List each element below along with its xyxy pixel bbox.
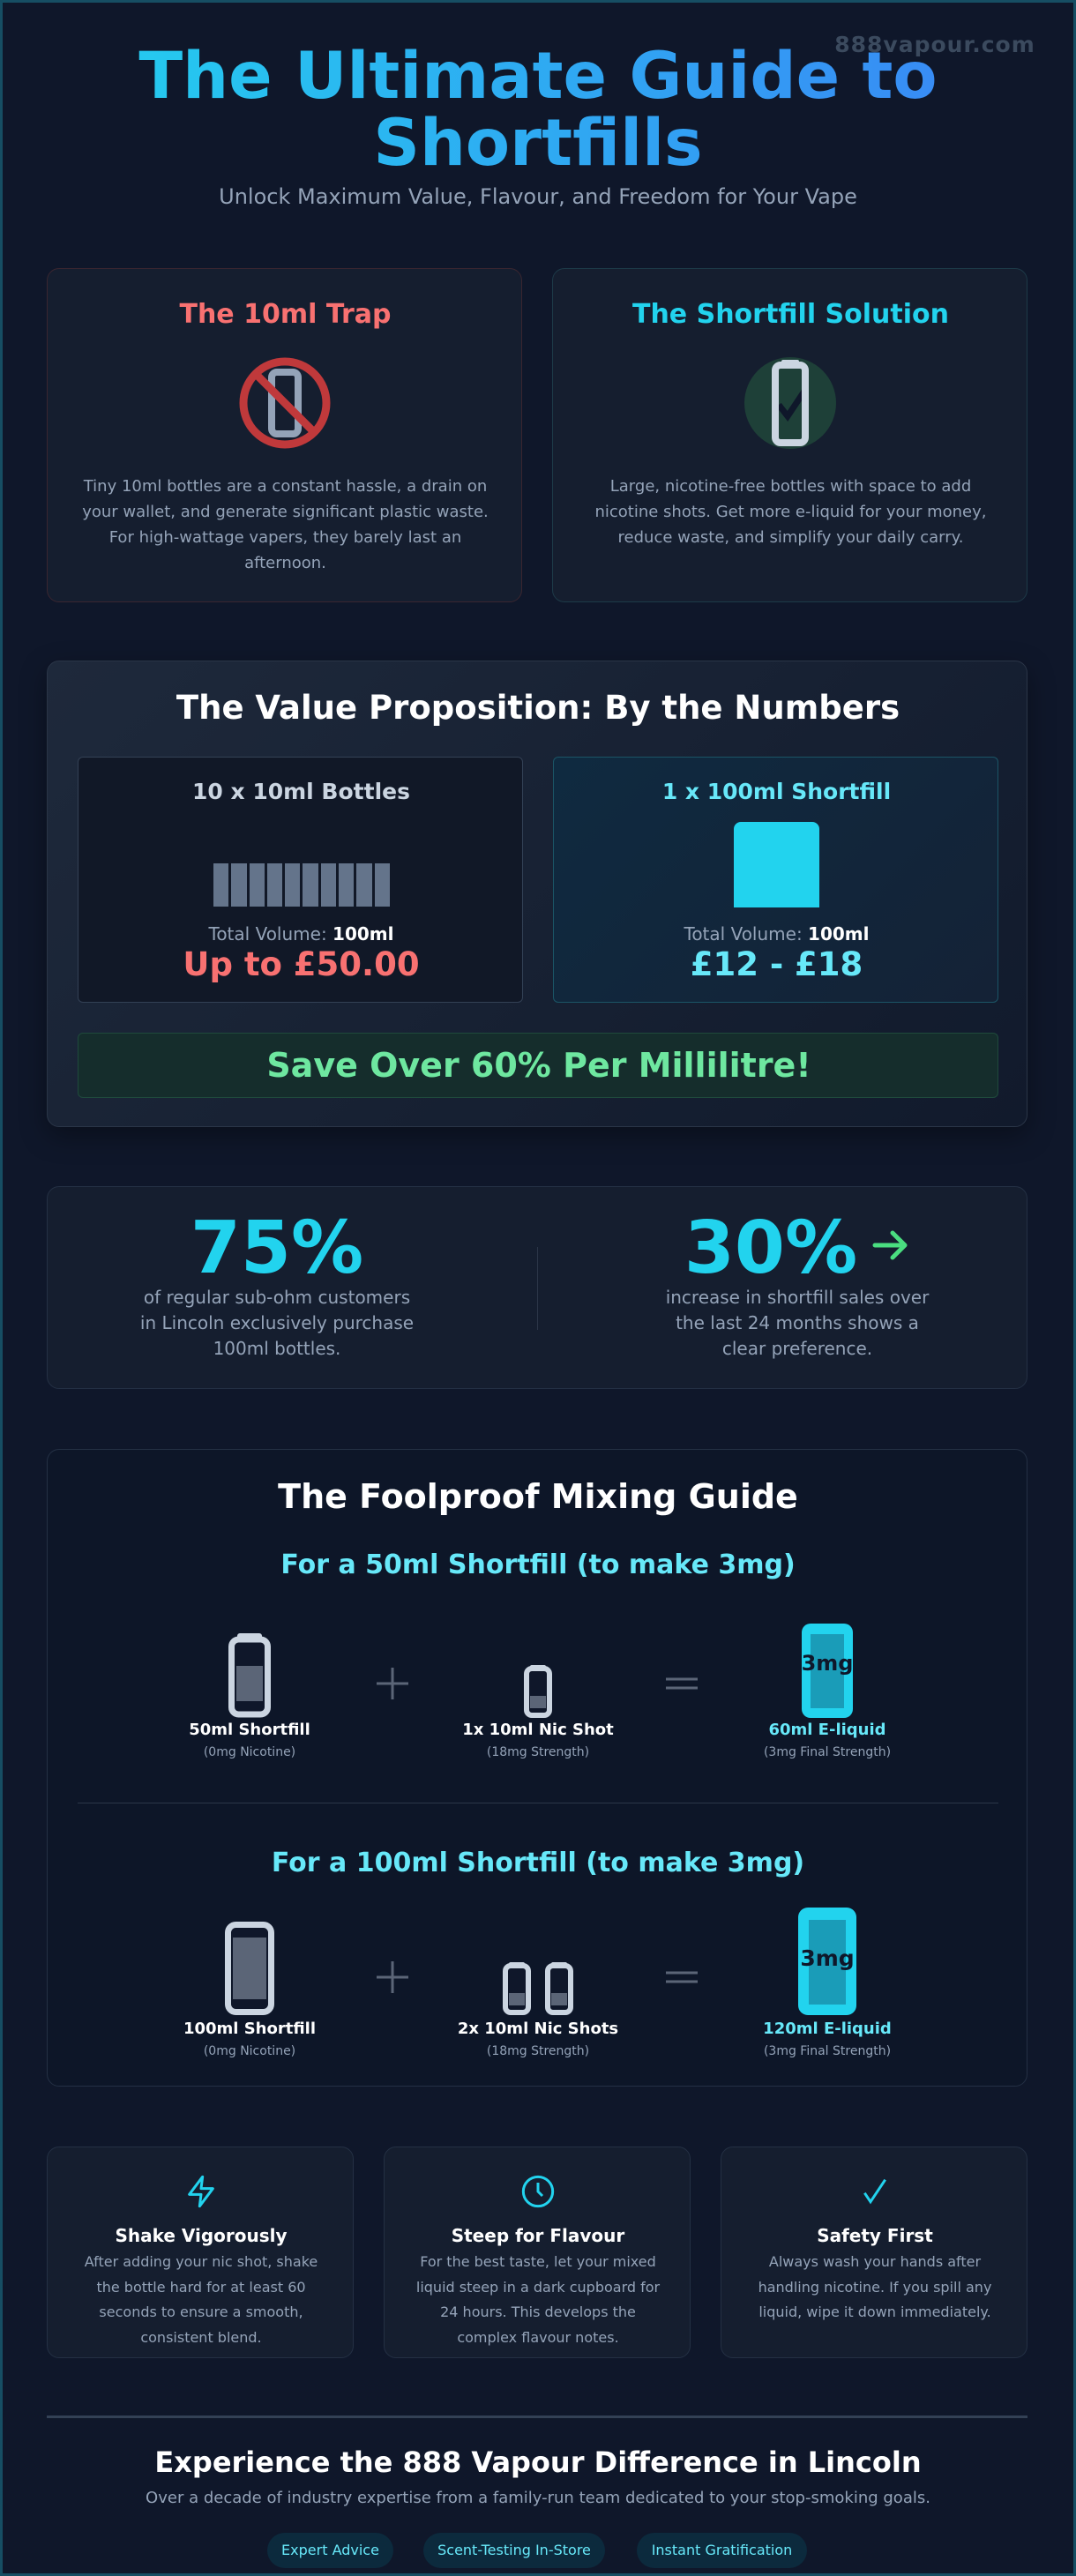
panel: the 10ml trap bbox=[47, 268, 522, 602]
icon: plus bbox=[377, 1668, 408, 1699]
heading: 10ml trap: The 10ml Trap bbox=[179, 299, 392, 330]
stat: 75%: 100ml bottles. bbox=[213, 1338, 340, 1359]
heading: mixing guide: The Foolproof Mixing Guide bbox=[278, 1477, 798, 1516]
pill: expert advice: Expert Advice bbox=[281, 2542, 379, 2558]
text: steep: complex flavour notes. bbox=[457, 2328, 619, 2346]
stat: 75%: 75% bbox=[191, 1206, 363, 1290]
price: up to 50: Up to £50.00 bbox=[183, 945, 420, 983]
subheading: 50ml: For a 50ml Shortfill (to make 3mg) bbox=[280, 1549, 796, 1580]
subtitle: Unlock Maximum Value, Flavour, and Freedom for Your Vape bbox=[219, 184, 857, 209]
label: 60ml e-liquid: 60ml E-liquid bbox=[768, 1721, 886, 1739]
stat: 30%: increase in shortfill sales over bbox=[666, 1287, 929, 1308]
text: steep: For the best taste, let your mixed bbox=[420, 2253, 656, 2270]
text: shake: seconds to ensure a smooth, bbox=[99, 2303, 303, 2320]
pill: instant gratification: Instant Gratification bbox=[652, 2542, 792, 2558]
icon: plus bbox=[377, 1961, 408, 1993]
icon: lightning bbox=[188, 2175, 214, 2208]
icon: clock bbox=[522, 2175, 554, 2208]
panel: mixing guide bbox=[47, 1449, 1027, 2087]
pill: scent testing: Scent-Testing In-Store bbox=[437, 2542, 591, 2558]
text: safety: liquid, wipe it down immediately. bbox=[758, 2303, 991, 2320]
text: safety: Always wash your hands after bbox=[769, 2253, 981, 2270]
icon: equals bbox=[666, 1972, 698, 1982]
heading: value proposition: The Value Proposition: By the Numbers bbox=[176, 689, 900, 727]
footer text: Over a decade of industry expertise from a family-run team dedicated to your stop-smoking goals. bbox=[146, 2489, 930, 2507]
icon: 60ml result: 3mg bbox=[802, 1651, 853, 1676]
text: 10ml trap description: afternoon. bbox=[244, 554, 326, 572]
text: 10ml trap description bbox=[82, 477, 489, 572]
text: steep: liquid steep in a dark cupboard for bbox=[416, 2279, 660, 2295]
label: 120ml e-liquid bbox=[763, 2020, 892, 2058]
text: shortfill description bbox=[594, 477, 987, 547]
icon: 120ml result: 3mg bbox=[800, 1945, 855, 1971]
text: total volume: Total Volume: 100ml bbox=[208, 923, 393, 945]
title bbox=[0, 43, 1076, 177]
label: 50ml shortfill: (0mg Nicotine) bbox=[204, 1745, 295, 1759]
icon: green arrow bbox=[873, 1231, 907, 1259]
label: nic shots: 2x 10ml Nic Shots bbox=[458, 2020, 618, 2038]
text: shake: After adding your nic shot, shake bbox=[85, 2253, 318, 2270]
label: nic shots: (18mg Strength) bbox=[487, 2044, 589, 2058]
icon: two nic shots bbox=[503, 1962, 573, 2015]
pill: scent testing bbox=[423, 2533, 605, 2568]
icon: check bbox=[863, 2178, 886, 2205]
label: 100ml shortfill bbox=[183, 2020, 316, 2058]
panel: tip shake bbox=[47, 2147, 354, 2358]
stat: 75% bbox=[140, 1206, 414, 1359]
text: shortfill description: reduce waste, and simplify your daily carry. bbox=[618, 528, 963, 547]
label: 50ml shortfill: 50ml Shortfill bbox=[189, 1721, 310, 1739]
footer pills bbox=[267, 2533, 807, 2568]
subpanel: 10 x 10ml bbox=[78, 757, 523, 1003]
stat: 75%: of regular sub-ohm customers bbox=[144, 1287, 410, 1308]
text: shake bbox=[85, 2253, 318, 2346]
callout: save over 60% bbox=[78, 1033, 998, 1098]
label: 60ml e-liquid: (3mg Final Strength) bbox=[764, 1745, 891, 1759]
label: nic shot: (18mg Strength) bbox=[487, 1745, 589, 1759]
text: total volume: Total Volume: 100ml bbox=[684, 923, 870, 945]
panel: shortfill solution bbox=[552, 268, 1027, 602]
text: safety: handling nicotine. If you spill any bbox=[758, 2279, 991, 2295]
row: 100ml recipe bbox=[183, 1908, 892, 2058]
subpanel: 1 x 100ml bbox=[553, 757, 998, 1003]
text: steep: 24 hours. This develops the bbox=[440, 2303, 636, 2320]
icon: nic shot bbox=[524, 1665, 552, 1718]
panel: stats bbox=[47, 1186, 1027, 1389]
text: 10ml trap description: your wallet, and generate significant plastic waste. bbox=[82, 503, 489, 521]
label: 120ml e-liquid: (3mg Final Strength) bbox=[764, 2044, 891, 2058]
text: shortfill description: Large, nicotine-free bottles with space to add bbox=[610, 477, 971, 496]
stat: 75%: in Lincoln exclusively purchase bbox=[140, 1312, 414, 1333]
callout: save over 60%: Save Over 60% Per Millilitre! bbox=[266, 1046, 811, 1085]
label: 120ml e-liquid: 120ml E-liquid bbox=[763, 2020, 892, 2038]
text: shake: consistent blend. bbox=[140, 2328, 262, 2346]
title: Shortfills bbox=[373, 106, 703, 181]
panel: tip safety bbox=[721, 2147, 1027, 2358]
price: 12-18: £12 - £18 bbox=[691, 945, 863, 983]
icon: 60ml result bbox=[802, 1624, 853, 1718]
text: steep bbox=[416, 2253, 660, 2346]
icon: 100ml bottle bbox=[225, 1922, 274, 2015]
watermark: 888vapour.com bbox=[834, 32, 1035, 57]
title: safety: Safety First bbox=[817, 2225, 933, 2246]
label: nic shots bbox=[458, 2020, 618, 2058]
label: 60ml e-liquid bbox=[764, 1721, 891, 1759]
footer heading: Experience the 888 Vapour Difference in Lincoln bbox=[154, 2445, 922, 2479]
pill: expert advice bbox=[267, 2533, 393, 2568]
subheading: 100ml: For a 100ml Shortfill (to make 3mg) bbox=[272, 1848, 804, 1878]
title: shake: Shake Vigorously bbox=[115, 2225, 288, 2246]
heading: shortfill solution: The Shortfill Solution bbox=[632, 299, 949, 330]
title: The Ultimate Guide to bbox=[138, 39, 938, 114]
stat: 30%: the last 24 months shows a bbox=[676, 1312, 919, 1333]
text: 10ml trap description: Tiny 10ml bottles are a constant hassle, a drain on bbox=[84, 477, 487, 496]
stat: 30%: 30% bbox=[684, 1206, 857, 1290]
icon: equals bbox=[666, 1677, 698, 1690]
chart: single large bottle bbox=[734, 822, 819, 907]
title: steep: Steep for Flavour bbox=[452, 2225, 624, 2246]
stat: 30%: clear preference. bbox=[722, 1338, 872, 1359]
label: 50ml shortfill bbox=[189, 1721, 310, 1759]
stat: 30% bbox=[666, 1206, 930, 1359]
text: 10ml trap description: For high-wattage vapers, they barely last an bbox=[109, 528, 461, 547]
label: nic shot: 1x 10ml Nic Shot bbox=[462, 1721, 614, 1739]
text: shake: the bottle hard for at least 60 bbox=[96, 2279, 306, 2295]
icon: 120ml result bbox=[798, 1908, 856, 2015]
heading: 10 bottles: 10 x 10ml Bottles bbox=[192, 779, 410, 804]
icon: 50ml bottle bbox=[228, 1633, 271, 1718]
text: shortfill description: nicotine shots. Get more e-liquid for your money, bbox=[594, 503, 987, 521]
chart: ten small bottles bbox=[213, 863, 390, 907]
text: safety bbox=[758, 2253, 991, 2320]
row: 50ml recipe bbox=[189, 1624, 891, 1759]
pill: instant gratification bbox=[637, 2533, 807, 2568]
label: 100ml shortfill: (0mg Nicotine) bbox=[204, 2044, 295, 2058]
heading: shortfill: 1 x 100ml Shortfill bbox=[662, 779, 891, 804]
panel: value proposition bbox=[47, 661, 1027, 1127]
icon: approved bottle bbox=[744, 357, 836, 449]
icon: banned bottle bbox=[240, 358, 330, 448]
panel: tip steep bbox=[384, 2147, 691, 2358]
label: nic shot bbox=[462, 1721, 614, 1759]
label: 100ml shortfill: 100ml Shortfill bbox=[183, 2020, 316, 2038]
